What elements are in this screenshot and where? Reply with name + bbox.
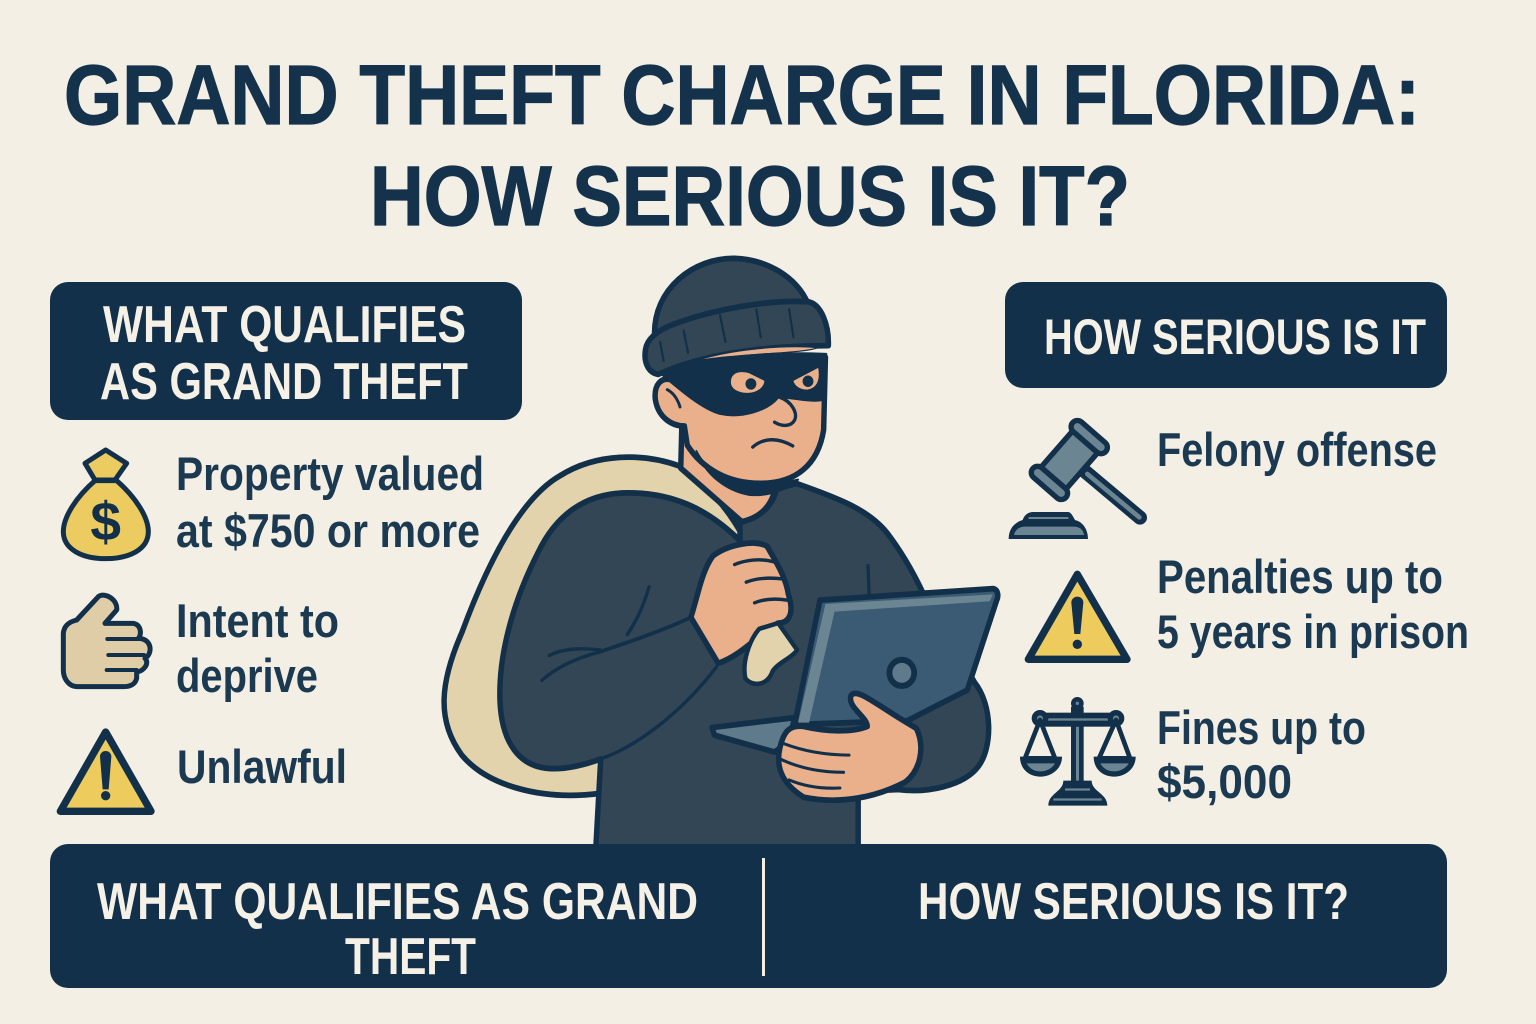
left pupil [745,378,756,390]
hat ribs [660,309,793,361]
cuff edge [600,617,691,652]
panel: what qualifies heading: WHAT QUALIFIES [103,296,466,354]
title [64,48,1420,243]
sack [444,457,745,795]
ear line [667,390,680,407]
laptop logo [889,660,914,686]
title: HOW SERIOUS IS IT? [370,149,1130,243]
right eye [793,368,819,390]
bottom banner: THEFT [345,928,476,986]
text: intent to deprive: Intent to [176,594,339,647]
sleeve folds [542,566,869,759]
icon: warning right [1028,574,1127,659]
panel: how serious heading [1005,282,1447,388]
mouth [753,440,793,447]
text: felony offense: Felony offense [1157,423,1437,476]
bottom banner: WHAT QUALIFIES AS GRAND [97,873,698,931]
text: penalties: Penalties up to [1157,550,1443,603]
strap hand [691,543,791,663]
right pupil [803,376,813,387]
text: fines: $5,000 [1157,755,1292,808]
forehead [693,347,818,362]
icon: warning left [60,732,151,811]
icon: hand [63,595,150,687]
panel: what qualifies heading: AS GRAND THEFT [100,353,468,411]
lower finger lines [780,744,849,788]
head [655,357,825,483]
laptop screen [795,589,998,724]
icon: money bag [63,450,148,559]
text: fines [1157,701,1366,808]
illustration: burglar with sack and laptop [444,258,998,851]
hat dome [654,258,808,342]
nose [775,397,795,425]
left eye [731,372,764,393]
text: fines: Fines up to [1157,701,1366,754]
icon: scales [1020,697,1136,806]
lower hand [779,693,921,800]
laptop base [712,718,795,752]
text: property valued: at $750 or more [176,504,480,557]
icon: money bag: $ [90,490,121,552]
text: penalties [1157,550,1469,658]
mask [662,353,826,415]
text: penalties: 5 years in prison [1157,605,1469,658]
text: property valued [176,447,484,557]
bottom banner [50,844,1447,988]
text: property valued: Property valued [176,447,484,500]
text: intent to deprive: deprive [176,649,318,702]
text: unlawful: Unlawful [177,740,347,793]
screen highlight [798,594,993,723]
sack knot [745,623,797,684]
chin shadow [696,451,798,495]
text: intent to deprive [176,594,339,702]
icon: gavel [1009,418,1140,539]
neck [681,426,776,522]
panel: what qualifies heading [50,282,522,420]
bottom banner: HOW SERIOUS IS IT? [918,873,1349,931]
hat band [645,301,828,374]
torso and arms [500,483,989,851]
finger lines [735,560,787,603]
panel: how serious heading: HOW SERIOUS IS IT [1044,309,1426,365]
